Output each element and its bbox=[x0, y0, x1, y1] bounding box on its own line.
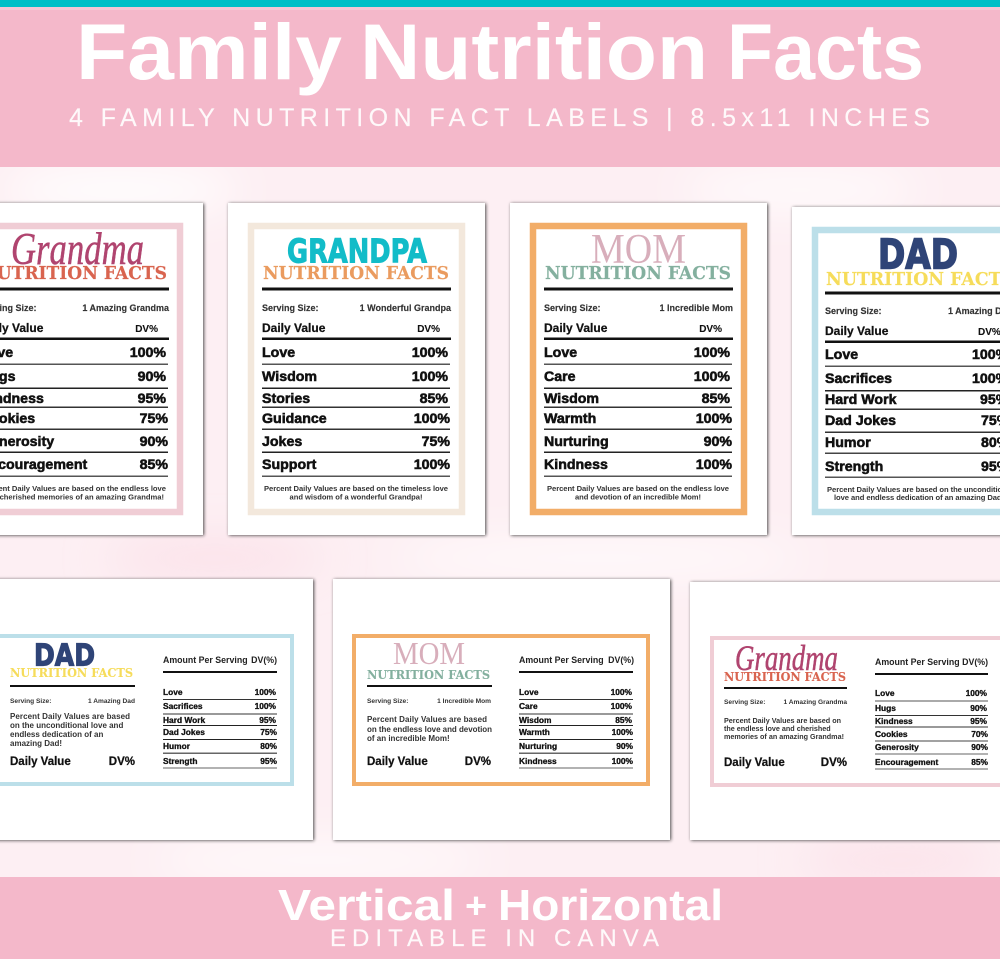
nutrition table: Grandma horizontal: Cookies bbox=[875, 729, 908, 739]
nutrition table: Grandma horizontal: 70% bbox=[971, 729, 989, 739]
heading: nutrition facts: NUTRITION FACTS bbox=[545, 264, 731, 284]
vertical card: Grandpa bbox=[228, 203, 485, 535]
nutrition table: Grandpa: Love bbox=[262, 345, 295, 361]
nutrition table: Mom horizontal: 100% bbox=[612, 727, 634, 737]
nutrition table: Grandma: 100% bbox=[130, 345, 166, 361]
nutrition table: Dad horizontal: 75% bbox=[260, 727, 278, 737]
nutrition table: Grandpa: 100% bbox=[414, 457, 450, 473]
summary block: Mom bbox=[367, 685, 492, 768]
heading: nutrition facts: NUTRITION FACTS bbox=[10, 666, 133, 680]
summary block: Dad: on the unconditional love and bbox=[10, 721, 123, 730]
nutrition table: Grandma horizontal: Encouragement bbox=[875, 757, 939, 767]
header band bbox=[0, 0, 1000, 167]
footer heading: + bbox=[465, 885, 487, 926]
nutrition table: Mom horizontal: 100% bbox=[611, 687, 633, 697]
nutrition table: Grandpa: DV% bbox=[417, 324, 440, 335]
nutrition table: Grandma horizontal: 90% bbox=[971, 742, 989, 752]
nutrition table: Dad horizontal: Strength bbox=[163, 756, 197, 766]
title bbox=[76, 7, 924, 96]
nutrition table: Grandma horizontal: DV(%) bbox=[962, 657, 988, 667]
nutrition table: Grandpa: Jokes bbox=[262, 434, 302, 450]
summary block: Mom: Daily Value bbox=[367, 756, 428, 768]
nutrition table: Dad horizontal: Humor bbox=[163, 741, 191, 751]
summary block: Mom: on the endless love and devotion bbox=[367, 725, 492, 734]
nutrition table: Dad horizontal bbox=[163, 655, 278, 768]
vertical card: Mom bbox=[510, 203, 767, 535]
summary block: Grandma: DV% bbox=[821, 757, 847, 769]
nutrition table: Dad horizontal: 100% bbox=[255, 701, 277, 711]
heading: Grandma: Grandma bbox=[735, 638, 838, 678]
horizontal card: Grandma bbox=[690, 582, 1000, 840]
nutrition table: Mom horizontal: Kindness bbox=[519, 756, 557, 766]
nutrition table: Dad: Love bbox=[825, 347, 858, 363]
nutrition table: Grandpa: 75% bbox=[422, 434, 450, 450]
heading: nutrition facts: NUTRITION FACTS bbox=[724, 670, 846, 684]
nutrition table: Mom horizontal: Wisdom bbox=[519, 715, 552, 725]
nutrition table: Mom: and devotion of an incredible Mom! bbox=[575, 492, 701, 502]
nutrition table: Dad horizontal: Sacrifices bbox=[163, 701, 203, 711]
summary block: Mom: Serving Size: bbox=[367, 698, 408, 705]
nutrition table: Dad: Serving Size: bbox=[825, 306, 882, 316]
heading: Dad: DAD bbox=[34, 638, 95, 674]
nutrition table: Grandpa: Stories bbox=[262, 391, 310, 407]
nutrition table: Mom horizontal: DV(%) bbox=[608, 655, 634, 665]
summary block: Dad: 1 Amazing Dad bbox=[88, 698, 135, 705]
nutrition table: Mom: Nurturing bbox=[544, 434, 609, 450]
nutrition table: Grandpa: Support bbox=[262, 457, 317, 473]
heading: nutrition facts: NUTRITION FACTS bbox=[263, 264, 449, 284]
nutrition table: Mom: 100% bbox=[696, 411, 732, 427]
nutrition table: Grandma horizontal: 100% bbox=[966, 688, 988, 698]
summary block: Grandma: Daily Value bbox=[724, 757, 785, 769]
title: Family bbox=[76, 7, 342, 96]
vertical card: Dad bbox=[792, 207, 1000, 535]
nutrition table: Grandma horizontal: Kindness bbox=[875, 716, 913, 726]
nutrition table: Grandpa: Percent Daily Values are based on the timeless love bbox=[264, 484, 448, 493]
nutrition table: Grandma: 90% bbox=[138, 369, 166, 385]
heading: Grandpa: GRANDPA bbox=[287, 232, 427, 270]
title: Facts bbox=[727, 7, 924, 96]
nutrition table: Dad: Hard Work bbox=[825, 392, 897, 408]
nutrition table: Dad horizontal: Dad Jokes bbox=[163, 727, 205, 737]
footer heading: Horizontal bbox=[498, 881, 723, 930]
nutrition table: Grandma horizontal: 95% bbox=[970, 716, 988, 726]
nutrition table: Mom: Kindness bbox=[544, 457, 608, 473]
nutrition table: Grandpa: 1 Wonderful Grandpa bbox=[360, 303, 452, 313]
nutrition table: Dad horizontal: 100% bbox=[255, 687, 277, 697]
summary block: Mom: Percent Daily Values are based bbox=[367, 715, 487, 724]
nutrition table: Mom: Daily Value bbox=[544, 321, 608, 335]
nutrition table: Mom horizontal: Amount Per Serving bbox=[519, 655, 604, 665]
summary block: Dad: endless dedication of an bbox=[10, 730, 103, 739]
nutrition table: Dad bbox=[825, 292, 1000, 502]
summary block: Dad bbox=[10, 685, 135, 768]
nutrition table: Mom: 90% bbox=[704, 434, 732, 450]
nutrition table: Grandpa: and wisdom of a wonderful Grandpa! bbox=[290, 492, 422, 502]
nutrition table: Grandpa: Daily Value bbox=[262, 321, 326, 335]
nutrition table: Dad horizontal: 80% bbox=[260, 741, 278, 751]
footer heading: Vertical bbox=[278, 881, 455, 930]
summary block: Dad: Serving Size: bbox=[10, 698, 51, 705]
horizontal card: Dad bbox=[0, 579, 313, 840]
nutrition table: Mom horizontal: 100% bbox=[611, 701, 633, 711]
nutrition table: Grandma: 95% bbox=[138, 391, 166, 407]
heading: Mom: MOM bbox=[393, 635, 465, 671]
nutrition table: Grandma horizontal: Hugs bbox=[875, 703, 896, 713]
nutrition table: Dad: Daily Value bbox=[825, 324, 889, 338]
nutrition table: Grandpa: 100% bbox=[414, 411, 450, 427]
nutrition table: Grandma horizontal: Generosity bbox=[875, 742, 919, 752]
nutrition table: Dad horizontal: Hard Work bbox=[163, 715, 206, 725]
nutrition table: Dad: love and endless dedication of an amazing Dad! bbox=[834, 493, 1000, 502]
nutrition table: Grandpa bbox=[262, 288, 452, 502]
summary block: Grandma: Serving Size: bbox=[724, 699, 765, 706]
summary block: Dad: Percent Daily Values are based bbox=[10, 712, 130, 721]
nutrition table: Mom: Care bbox=[544, 369, 576, 385]
heading: Mom: MOM bbox=[591, 227, 686, 273]
nutrition table: Grandma: DV% bbox=[135, 324, 158, 335]
horizontal card: Mom bbox=[333, 579, 670, 840]
summary block: Mom: of an incredible Mom! bbox=[367, 734, 450, 743]
nutrition table: Dad horizontal: 95% bbox=[260, 756, 278, 766]
nutrition table: Mom: 85% bbox=[702, 391, 730, 407]
heading: Dad: DAD bbox=[878, 230, 958, 278]
heading: Grandma: Grandma bbox=[11, 223, 144, 274]
nutrition table: Grandma horizontal: Amount Per Serving bbox=[875, 657, 960, 667]
nutrition table: Mom bbox=[544, 288, 733, 502]
nutrition table: Mom horizontal: 85% bbox=[615, 715, 633, 725]
nutrition table: Mom: Wisdom bbox=[544, 391, 599, 407]
nutrition table: Mom horizontal bbox=[519, 655, 634, 768]
nutrition table: Dad horizontal: DV(%) bbox=[251, 655, 277, 665]
nutrition table: Mom horizontal: 90% bbox=[616, 741, 634, 751]
nutrition table: Mom: 100% bbox=[696, 457, 732, 473]
nutrition table: Mom horizontal: Care bbox=[519, 701, 538, 711]
nutrition table: Dad horizontal: Love bbox=[163, 687, 183, 697]
footer heading bbox=[278, 881, 723, 930]
nutrition table: Dad horizontal: Amount Per Serving bbox=[163, 655, 248, 665]
nutrition table: Grandma bbox=[0, 288, 170, 502]
nutrition table: Grandpa: 100% bbox=[412, 345, 448, 361]
nutrition table: Grandpa: 85% bbox=[420, 391, 448, 407]
nutrition table: Mom horizontal: Nurturing bbox=[519, 741, 557, 751]
subtitle: 4 FAMILY NUTRITION FACT LABELS | 8.5x11 INCHES bbox=[69, 104, 930, 132]
summary block: Dad: Daily Value bbox=[10, 756, 71, 768]
nutrition table: Mom: Serving Size: bbox=[544, 303, 601, 313]
nutrition table: Grandpa: 100% bbox=[412, 369, 448, 385]
summary block: Dad: DV% bbox=[109, 756, 135, 768]
nutrition table: Mom horizontal: 100% bbox=[612, 756, 634, 766]
vertical card: Grandma bbox=[0, 203, 203, 535]
summary block: Dad: amazing Dad! bbox=[10, 739, 62, 748]
nutrition table: Grandpa: Guidance bbox=[262, 411, 327, 427]
nutrition table: Mom: 1 Incredible Mom bbox=[659, 303, 733, 313]
title: Nutrition bbox=[360, 7, 708, 96]
footer subheading: EDITABLE IN CANVA bbox=[330, 925, 659, 952]
summary block: Mom: 1 Incredible Mom bbox=[437, 698, 491, 705]
nutrition table: Grandma: 90% bbox=[140, 434, 168, 450]
nutrition table: Mom: 100% bbox=[694, 345, 730, 361]
nutrition table: Grandma: 85% bbox=[140, 457, 168, 473]
nutrition table: Mom: Percent Daily Values are based on the endless love bbox=[547, 484, 729, 493]
summary block: Grandma: memories of an amazing Grandma! bbox=[724, 732, 844, 741]
nutrition table: Grandma: 75% bbox=[140, 411, 168, 427]
nutrition table: Grandma horizontal bbox=[875, 657, 989, 770]
nutrition table: Mom horizontal: Warmth bbox=[519, 727, 550, 737]
nutrition table: Dad: Sacrifices bbox=[825, 371, 892, 387]
nutrition table: Mom: 100% bbox=[694, 369, 730, 385]
nutrition table: Mom horizontal: Love bbox=[519, 687, 539, 697]
nutrition table: Dad: Dad Jokes bbox=[825, 413, 896, 429]
nutrition table: Grandpa: Wisdom bbox=[262, 369, 317, 385]
summary block: Grandma: Percent Daily Values are based on bbox=[724, 716, 841, 725]
summary block: Grandma: 1 Amazing Grandma bbox=[783, 699, 847, 706]
nutrition table: Grandma: 1 Amazing Grandma bbox=[82, 303, 170, 313]
summary block: Grandma bbox=[724, 687, 847, 769]
summary block: Grandma: the endless love and cherished bbox=[724, 724, 831, 733]
nutrition table: Dad: Strength bbox=[825, 459, 883, 475]
summary block: Mom: DV% bbox=[465, 756, 491, 768]
nutrition table: Grandma horizontal: 90% bbox=[970, 703, 988, 713]
heading: nutrition facts: NUTRITION FACTS bbox=[367, 668, 490, 682]
nutrition table: Dad horizontal: 95% bbox=[259, 715, 277, 725]
nutrition table: Mom: Warmth bbox=[544, 411, 596, 427]
nutrition table: Grandma horizontal: 85% bbox=[971, 757, 989, 767]
nutrition table: Mom: Love bbox=[544, 345, 577, 361]
nutrition table: Mom: DV% bbox=[699, 324, 722, 335]
nutrition table: Dad: Humor bbox=[825, 435, 871, 451]
nutrition table: Grandpa: Serving Size: bbox=[262, 303, 319, 313]
nutrition table: Grandma horizontal: Love bbox=[875, 688, 895, 698]
footer band bbox=[0, 877, 1000, 959]
